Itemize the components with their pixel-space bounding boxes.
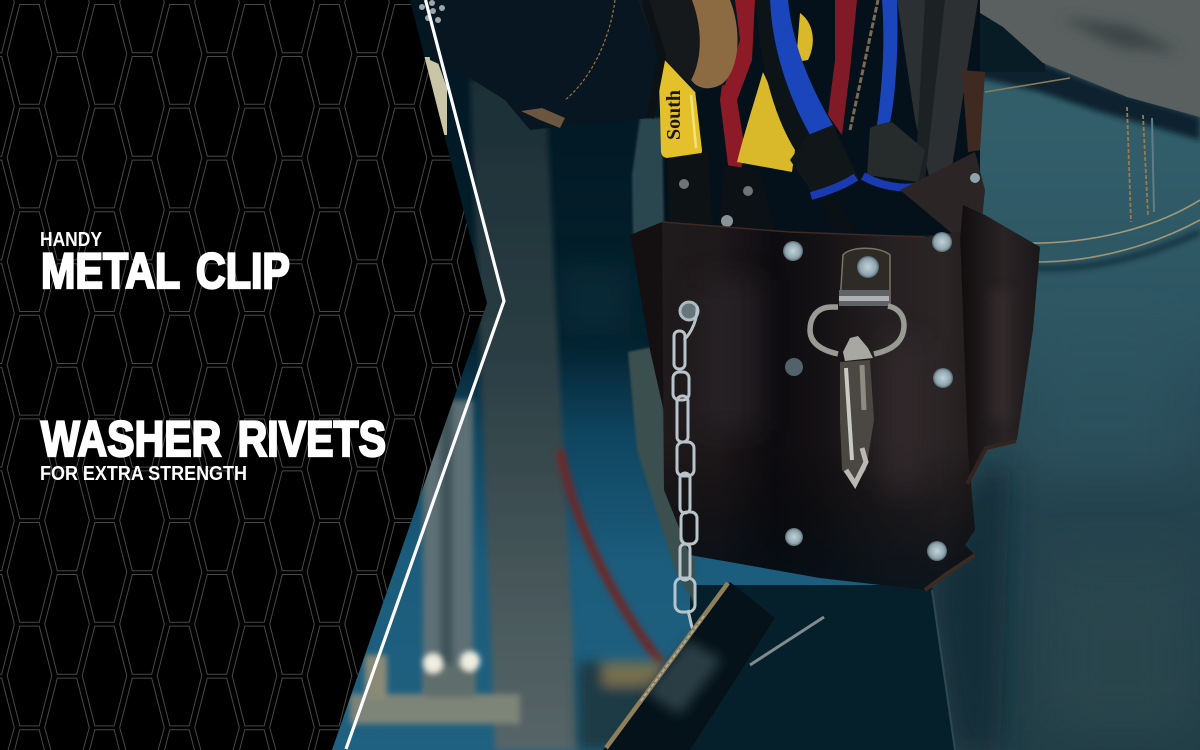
- panel: black hexagon chevron: [0, 0, 502, 750]
- black crimper jaws: [667, 152, 775, 228]
- belt loop: [962, 70, 985, 152]
- blurred workshop background: [330, 0, 1200, 750]
- grey strap: [897, 0, 978, 180]
- rivets: [783, 232, 953, 561]
- work glove: [419, 0, 740, 130]
- yellow handle: South: [658, 50, 702, 158]
- jeans and shirt: [690, 0, 1200, 750]
- glove grip dots: [419, 0, 445, 23]
- background poles: [423, 80, 578, 750]
- hexagon line pattern: [0, 0, 502, 750]
- heading: metal clip: METAL CLIP: [41, 243, 290, 299]
- callout: handy metal clip: [40, 228, 290, 299]
- right clamp: [578, 662, 668, 750]
- leather pouch: [630, 70, 1040, 632]
- upper left jeans: [632, 118, 664, 236]
- under-shirt shadow: [975, 14, 1200, 140]
- callout: washer rivets: [40, 411, 386, 485]
- tool backdrop: [660, 0, 980, 235]
- heading: washer rivets: WASHER RIVETS: [41, 411, 386, 467]
- label: handy: HANDY: [40, 228, 102, 251]
- blue pliers: [756, 0, 925, 235]
- metal clip: [810, 248, 904, 485]
- second yellow handle: [737, 13, 813, 172]
- metal clamp: [350, 651, 520, 724]
- dark lower shorts shadow: [690, 585, 955, 750]
- side pockets: [630, 222, 668, 430]
- shadow beside pouch: [932, 470, 1010, 750]
- left jeans leg: [628, 345, 695, 605]
- red hose: [560, 450, 662, 664]
- grey shirt: [978, 0, 1200, 117]
- photo: worker with leather tool pouch: [330, 0, 1200, 750]
- chain: [673, 302, 698, 632]
- main front panel: [662, 222, 975, 590]
- red handles: [720, 0, 755, 175]
- yellow handle: South: South: [663, 90, 685, 140]
- white chevron outline arrow: [346, 0, 504, 749]
- label: for extra strength: FOR EXTRA STRENGTH: [40, 462, 247, 485]
- seams and pocket stitching: [985, 78, 1070, 92]
- tools in pouch: [628, 0, 980, 605]
- roll of tape: [603, 582, 824, 750]
- denim: [932, 60, 1200, 750]
- leather highlights: [700, 280, 760, 430]
- cream pole strip: [420, 57, 447, 135]
